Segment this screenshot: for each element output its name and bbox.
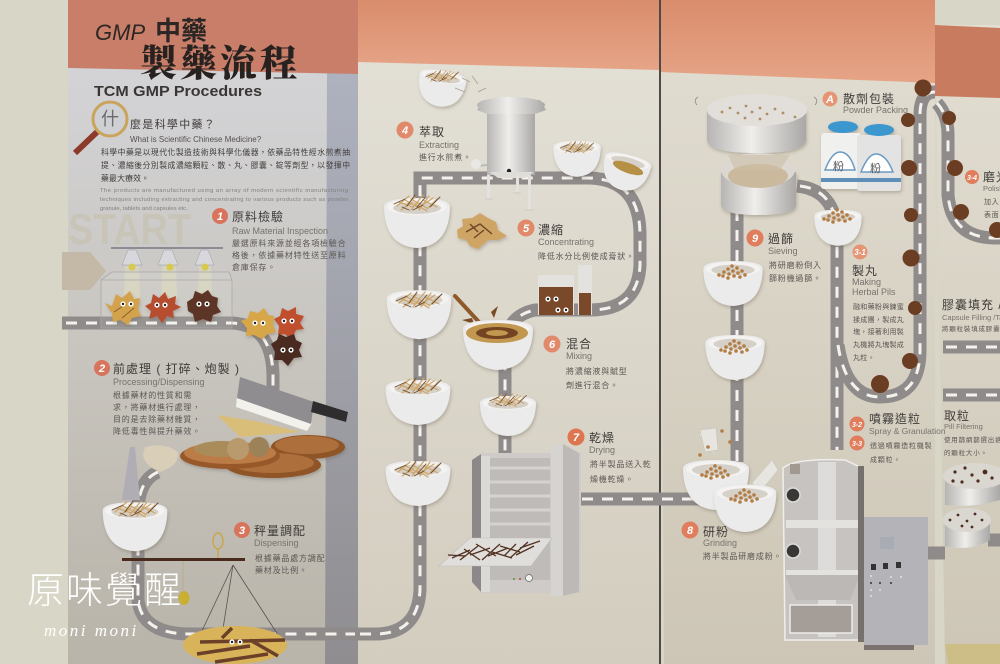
step 9: 篩粉機過篩。 bbox=[769, 273, 822, 283]
illustration: powder bottles bbox=[821, 121, 901, 191]
step 3-1 making pills: 3-1 bbox=[854, 248, 866, 257]
step 7: 7 bbox=[573, 432, 580, 444]
step 2 bbox=[94, 360, 240, 436]
step 3-1 making pills: 融和藥粉與鍊蜜 bbox=[853, 302, 904, 311]
illustration: filter cylinders bbox=[943, 463, 1000, 548]
step 8: 研粉 bbox=[703, 525, 729, 539]
step 3-1 making pills: 丸粒。 bbox=[853, 353, 875, 362]
illustration: sieving bowls bbox=[703, 261, 765, 380]
step 9: 過篩 bbox=[768, 231, 794, 246]
step 2: 根據藥材的性質和需 bbox=[113, 390, 192, 400]
step 3-1 making pills: Making bbox=[852, 277, 881, 287]
step capsule filling fragment bbox=[942, 297, 1000, 333]
step 8: 將半製品研磨成粉。 bbox=[703, 551, 782, 561]
title bbox=[95, 16, 300, 85]
illustration: herb bowls left column bbox=[384, 195, 451, 506]
step 9: 9 bbox=[752, 233, 759, 245]
title: GMP bbox=[95, 20, 145, 45]
step 7: 乾燥 bbox=[589, 431, 615, 445]
panel: second board bbox=[358, 0, 660, 664]
process road network bbox=[62, 92, 1000, 634]
step 7: 燥機乾燥。 bbox=[590, 474, 634, 484]
step 2: 目的是去除藥材雜質， bbox=[113, 414, 201, 424]
intro text: techniques including extracting and concentrating to various products such as powder, bbox=[100, 197, 350, 203]
start sign bbox=[62, 205, 191, 290]
illustration: cleaver and plates bbox=[143, 377, 348, 478]
step 4 bbox=[396, 122, 472, 162]
step pill filtering fragment: Pill Filtering bbox=[944, 422, 983, 431]
step 6: 劑進行混合。 bbox=[566, 380, 619, 390]
step 4: 進行水煎煮。 bbox=[419, 152, 472, 162]
step 3: 藥材及比例。 bbox=[255, 565, 308, 575]
step 8: Grinding bbox=[703, 538, 737, 548]
step 9: Sieving bbox=[768, 246, 798, 256]
step spray granulation: Spray & Granulation bbox=[869, 426, 946, 436]
step 6: 混合 bbox=[566, 336, 592, 351]
step 3 bbox=[234, 522, 325, 575]
illustration: brown pills on road bbox=[871, 80, 1000, 393]
step 5: Concentrating bbox=[538, 237, 594, 247]
illustration: extraction pot bbox=[471, 97, 546, 210]
step 3: Dispensing bbox=[254, 538, 299, 548]
step 2: 前處理 ( 打碎、炮製 ) bbox=[113, 361, 240, 376]
step spray granulation: 透過噴霧造粒機製 bbox=[870, 441, 932, 450]
step 2: 2 bbox=[98, 363, 105, 375]
step 4: Extracting bbox=[419, 140, 459, 150]
subtitle: TCM GMP Procedures bbox=[94, 83, 262, 100]
step 4: 萃取 bbox=[419, 125, 445, 139]
title: 製藥流程 bbox=[140, 43, 300, 85]
display case with lamps bbox=[101, 247, 232, 328]
panel: third board bbox=[659, 0, 935, 664]
step 2: Processing/Dispensing bbox=[113, 377, 205, 387]
step spray granulation bbox=[850, 411, 946, 464]
illustration: beakers bbox=[538, 265, 592, 315]
step A: 散劑包裝 bbox=[843, 91, 895, 106]
step 3-1 making pills: 塊，接著利用製 bbox=[853, 327, 904, 336]
step pill filtering fragment bbox=[944, 408, 1000, 457]
step 1: 倉庫保存。 bbox=[232, 262, 276, 272]
step 2: 求，將藥材進行處理， bbox=[113, 402, 201, 412]
step spray granulation: 噴霧造粒 bbox=[869, 411, 921, 426]
intro text: The products are manufactured using an array of modern scientific manufacturing bbox=[100, 188, 348, 194]
illustration: mortar bbox=[103, 447, 167, 551]
illustration: top bowl with herbs bbox=[415, 67, 486, 110]
start sign: START bbox=[68, 205, 191, 254]
illustration: vibrating sieve bbox=[695, 94, 817, 215]
step spray granulation: 成顆粒。 bbox=[870, 455, 901, 464]
intro text: What is Scientific Chinese Medicine? bbox=[130, 135, 262, 144]
step 3-4 polishing fragment: 表面 bbox=[984, 210, 1000, 219]
intro text: 藥最大療效。 bbox=[101, 173, 149, 183]
illustration: drying machine bbox=[439, 444, 581, 596]
watermark: moni moni bbox=[44, 621, 139, 640]
step A bbox=[822, 91, 908, 115]
step 9 bbox=[746, 230, 822, 283]
step A: Powder Packing bbox=[843, 105, 908, 115]
illustration: bead bowl bbox=[814, 208, 862, 246]
step 7: 將半製品送入乾 bbox=[590, 459, 652, 469]
title: 中藥 bbox=[155, 16, 207, 46]
intro text: 科學中藥是以現代化製造技術與科學化儀器，依藥品特性經水煎煮抽 bbox=[101, 147, 350, 157]
step 1: 1 bbox=[217, 211, 223, 223]
step spray granulation: 3-3 bbox=[852, 441, 862, 448]
step 7 bbox=[568, 428, 652, 484]
illustration: powder bottles: 粉 bbox=[870, 162, 881, 175]
herb characters on road bbox=[105, 290, 304, 366]
step 5 bbox=[518, 220, 635, 261]
step spray granulation: 3-2 bbox=[852, 422, 862, 429]
step 7: Drying bbox=[589, 445, 615, 455]
step 3: 3 bbox=[239, 525, 245, 537]
step 3: 根據藥品處方調配 bbox=[255, 553, 325, 563]
illustration: mixing bowl bbox=[455, 296, 533, 370]
watermark bbox=[27, 570, 183, 640]
step pill filtering fragment: 的顆粒大小。 bbox=[944, 448, 988, 457]
step 3-1 making pills bbox=[852, 244, 904, 362]
illustration: fluid bed granulator bbox=[783, 460, 864, 642]
illustration: powder bottles: 粉 bbox=[833, 160, 844, 173]
illustration: control cabinet bbox=[864, 517, 928, 650]
illustration: bowls with liquid bbox=[553, 141, 653, 196]
step 9: 將研磨粉倒入 bbox=[769, 260, 822, 270]
step 6 bbox=[544, 336, 628, 390]
watermark: 原味覺醒 bbox=[27, 570, 183, 611]
step 1: Raw Material Inspection bbox=[232, 226, 328, 236]
step 3-4 polishing fragment: 3-4 bbox=[967, 175, 977, 182]
intro text: 麼是科學中藥？ bbox=[130, 117, 216, 131]
step 6: 將濃縮液與賦型 bbox=[566, 366, 628, 376]
step 3-1 making pills: 製丸 bbox=[852, 264, 878, 278]
step 3: 秤量調配 bbox=[254, 524, 306, 538]
illustration: small dried herb bowl bbox=[480, 394, 536, 436]
step pill filtering fragment: 取粒 bbox=[944, 408, 970, 423]
step 1 bbox=[212, 208, 346, 272]
step 5: 濃縮 bbox=[538, 222, 564, 237]
step 3-1 making pills: 揉成團，製成丸 bbox=[853, 315, 904, 324]
illustration: grinding bowls bbox=[683, 428, 778, 532]
intro text: 提、濃縮後分別製成濃縮顆粒、散、丸、膠囊、錠等劑型，以發揮中 bbox=[101, 160, 350, 170]
panel: fourth board bbox=[935, 25, 1000, 664]
step 3-4 polishing fragment: 加入 bbox=[984, 197, 1000, 206]
illustration: scale bbox=[122, 533, 287, 664]
step 5: 降低水分比例使成膏狀。 bbox=[538, 251, 635, 261]
step 4: 4 bbox=[401, 125, 408, 137]
icon: magnifier bbox=[75, 102, 127, 153]
step 3-1 making pills: 丸機將丸塊製成 bbox=[853, 340, 904, 349]
step 3-1 making pills: Herbal Pils bbox=[852, 287, 896, 297]
step 8 bbox=[682, 522, 782, 561]
step 1: 嚴選原料來源並經各項檢驗合 bbox=[232, 238, 346, 248]
illustration: ginseng herb bbox=[457, 213, 507, 249]
step 2: 降低毒性與提升藥效。 bbox=[113, 426, 201, 436]
step 3-4 polishing fragment bbox=[965, 170, 1000, 219]
intro text: granule, tablets and capsules etc. bbox=[100, 206, 188, 212]
panel: first board bbox=[68, 0, 358, 664]
step 5: 5 bbox=[523, 223, 530, 235]
icon: magnifier: 什 bbox=[101, 109, 119, 129]
intro text bbox=[100, 117, 350, 212]
step 8: 8 bbox=[687, 525, 694, 537]
step 1: 格後，依據藥材特性送至原料 bbox=[232, 250, 346, 260]
step 1: 原料檢驗 bbox=[232, 209, 284, 224]
step 6: Mixing bbox=[566, 351, 592, 361]
step A: A bbox=[825, 94, 834, 106]
step 6: 6 bbox=[549, 339, 556, 351]
